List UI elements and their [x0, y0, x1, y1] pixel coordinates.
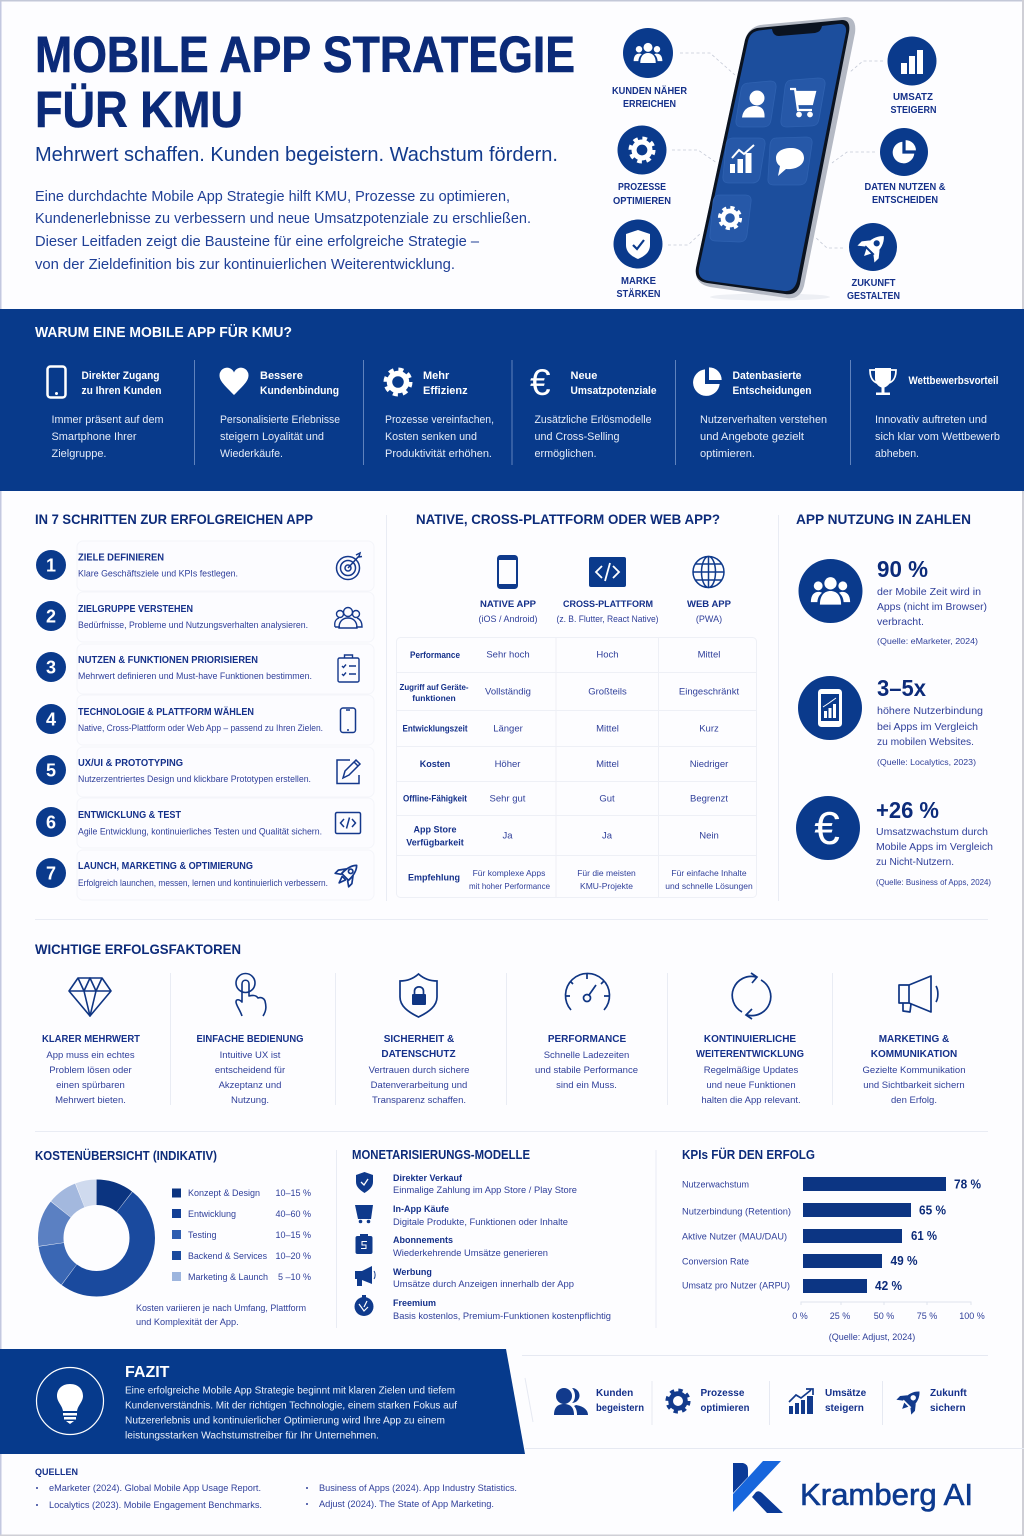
outcome: umsätze steigern: Umsätze [825, 1388, 867, 1399]
panel: native cross-plattform web comparison: NATIVE, CROSS-PLATTFORM ODER WEB APP? [416, 511, 720, 527]
outcome: zukunft sichern: Zukunft [930, 1388, 967, 1399]
stat: 3-5x: zu mobilen Websites. [877, 736, 974, 748]
panel: warum eine mobile app: WARUM EINE MOBILE APP FÜR KMU? [35, 324, 292, 341]
comparison table: Kosten [420, 759, 450, 769]
benefit: umsatzpotenziale: Zusätzliche Erlösmodelle [534, 414, 652, 426]
step 2 [36, 601, 362, 631]
stat: +26 %: (Quelle: Business of Apps, 2024) [876, 877, 991, 887]
intro paragraph: von der Zieldefinition bis zur kontinuierlichen Weiterentwicklung. [35, 257, 455, 273]
model: direkter verkauf: Direkter Verkauf [393, 1173, 463, 1183]
donut legend: Testing [188, 1230, 217, 1240]
model: in-app käufe [355, 1204, 568, 1227]
outcome: umsätze steigern: steigern [825, 1403, 864, 1414]
factor: einfache bedienung [196, 974, 304, 1106]
tile icon: person [742, 90, 765, 118]
tile icon: growth chart [730, 145, 754, 173]
benefit: direkter zugang: zu Ihren Kunden [82, 385, 162, 397]
step 6 [36, 807, 360, 837]
cost note: Kosten variieren je nach Umfang, Plattform [136, 1303, 306, 1313]
benefit: umsatzpotenziale: ermöglichen. [534, 448, 596, 460]
logo: kramberg ai: Kramberg AI [800, 1477, 973, 1512]
outcome: prozesse optimieren: Prozesse [700, 1388, 745, 1399]
panel: app nutzung in zahlen: APP NUTZUNG IN ZAHLEN [796, 511, 971, 527]
hero feature: Kunden näher erreichen: KUNDEN NÄHER [612, 84, 687, 97]
stat: 90 % [798, 556, 987, 646]
tile icon: chat bubble [776, 148, 804, 176]
comparison table: Höher [495, 759, 520, 770]
fazit panel [0, 1349, 525, 1454]
comparison table: App Store [413, 824, 457, 834]
donut legend: Marketing & Launch [188, 1272, 268, 1282]
comparison table: Sehr gut [490, 794, 526, 804]
comparison table: und schnelle Lösungen [665, 881, 753, 891]
quellen [35, 1467, 517, 1510]
step 2: ZIELGRUPPE VERSTEHEN [78, 603, 193, 615]
quellen: Adjust (2024). The State of App Marketing. [319, 1499, 494, 1509]
step 7: Erfolgreich launchen, messen, lernen und kontinuierlich verbessern. [78, 878, 328, 888]
fazit panel: Nutzererlebnis und kontinuierlicher Optimierung wird Ihre App zu einem [125, 1416, 445, 1426]
step 3: Mehrwert definieren und Must-have Funktionen bestimmen. [78, 671, 312, 681]
panel: app nutzung in zahlen [796, 511, 993, 887]
intro paragraph: Kundenerlebnisse zu verbessern und neue Umsatzpotenziale zu erschließen. [35, 211, 531, 227]
stat: 3-5x: 3–5x [877, 675, 926, 701]
comparison table: Kurz [699, 724, 719, 734]
factor: weiterentwicklung: KONTINUIERLICHE [704, 1034, 796, 1045]
donut legend: 40–60 % [275, 1209, 311, 1219]
benefit: datenbasiert [693, 367, 827, 460]
benefit: kundenbindung: Bessere [260, 370, 303, 382]
factor: sicherheit: Transparenz schaffen. [372, 1095, 466, 1106]
step 1: Klare Geschäftsziele und KPIs festlegen. [78, 568, 238, 578]
kpi labels: Nutzerbindung (Retention) [682, 1206, 791, 1216]
hero feature: Umsatz steigern: UMSATZ [893, 91, 934, 103]
hero feature: Umsatz steigern [888, 36, 936, 116]
stat: 3-5x: bei Apps im Vergleich [877, 721, 978, 733]
comparison table: Eingeschränkt [679, 686, 739, 698]
model: abonnements [356, 1234, 548, 1258]
column head: cross-plattform: CROSS-PLATTFORM [563, 599, 653, 610]
cost note [136, 1303, 306, 1327]
comparison table: Entwicklungszeit [402, 724, 468, 734]
factor: klarer mehrwert: Mehrwert bieten. [55, 1095, 126, 1106]
step 2: Bedürfnisse, Probleme und Nutzungsverhalten analysieren. [78, 620, 308, 630]
benefit: umsatzpotenziale: Neue [570, 370, 597, 382]
quellen: Localytics (2023). Mobile Engagement Benchmarks. [49, 1500, 262, 1510]
stat: 3-5x: (Quelle: Localytics, 2023) [877, 757, 976, 767]
panel: wichtige erfolgsfaktoren: WICHTIGE ERFOLGSFAKTOREN [35, 941, 241, 957]
title: MOBILE APP STRATEGIE [35, 26, 575, 83]
cost note: und Komplexität der App. [136, 1317, 239, 1327]
hero feature: Umsatz steigern: STEIGERN [890, 104, 936, 116]
kpi labels: Umsatz pro Nutzer (ARPU) [682, 1280, 790, 1290]
factor: marketing [863, 976, 965, 1106]
stat: 90 %: der Mobile Zeit wird in [877, 586, 981, 598]
intro paragraph: Eine durchdachte Mobile App Strategie hilft KMU, Prozesse zu optimieren, [35, 189, 510, 205]
phone body [696, 17, 855, 300]
model: abonnements: Abonnements [393, 1235, 453, 1245]
comparison table: funktionen [412, 693, 456, 703]
panel: kpis für den erfolg: KPIs FÜR DEN ERFOLG [682, 1147, 815, 1162]
panel: monetarisierungs-modelle: MONETARISIERUNGS-MODELLE [352, 1148, 530, 1162]
icon: light bulb [36, 1368, 104, 1434]
comparison table: Ja [602, 830, 613, 842]
model: freemium: Freemium [393, 1298, 436, 1308]
benefit: wettbewerbsvorteil: sich klar vom Wettbewerb [875, 431, 1000, 443]
donut legend: 10–15 % [275, 1188, 311, 1198]
comparison table: Verfügbarkeit [406, 838, 464, 848]
factor: marketing: KOMMUNIKATION [871, 1049, 957, 1060]
benefit: umsatzpotenziale [530, 362, 656, 460]
comparison table: Mittel [596, 759, 619, 770]
benefit: wettbewerbsvorteil: Wettbewerbsvorteil [908, 375, 998, 387]
factor: sicherheit [369, 974, 469, 1106]
column head: native app [478, 599, 538, 624]
benefit: kundenbindung: Wiederkäufe. [220, 448, 283, 460]
benefit: kundenbindung [219, 368, 340, 460]
outcome: kunden begeistern [554, 1388, 644, 1415]
model: in-app käufe: In-App Käufe [393, 1204, 449, 1214]
step 7 [36, 858, 363, 890]
app tiles [710, 78, 825, 242]
column dividers bottom row [336, 1150, 656, 1328]
hero feature: Daten nutzen [864, 128, 946, 206]
kpi values [875, 1178, 981, 1293]
panel: kpis für den erfolg [682, 1147, 985, 1342]
factor: einfache bedienung: Akzeptanz und [219, 1080, 281, 1091]
benefit: kundenbindung: steigern Loyalität und [220, 431, 324, 443]
outcome: zukunft sichern [895, 1384, 967, 1416]
hero: phone illustration [668, 17, 883, 300]
hero feature: Prozesse optimieren: PROZESSE [618, 181, 666, 193]
fazit panel: Kundenverständnis. Mit der richtigen Technologie, einem starken Fokus auf [125, 1400, 457, 1412]
step 3: 3 [46, 658, 56, 678]
factor: klarer mehrwert: KLARER MEHRWERT [42, 1034, 140, 1045]
donut legend: Backend & Services [188, 1251, 267, 1261]
factor: einfache bedienung: EINFACHE BEDIENUNG [196, 1034, 304, 1045]
hero feature: Daten nutzen: DATEN NUTZEN & [864, 181, 946, 193]
benefit: umsatzpotenziale: und Cross-Selling [534, 431, 620, 443]
benefit: datenbasiert: Datenbasierte [732, 370, 802, 382]
kpi values: 65 % [919, 1204, 946, 1218]
stat: 90 %: verbracht. [877, 616, 924, 628]
column head: web app [687, 599, 732, 624]
factor: einfache bedienung: Nutzung. [231, 1095, 269, 1106]
benefit: direkter zugang: Zielgruppe. [52, 448, 106, 460]
model: freemium: Basis kostenlos, Premium-Funktionen kostenpflichtig [393, 1311, 611, 1321]
benefit: wettbewerbsvorteil: abheben. [875, 448, 919, 460]
factor: weiterentwicklung: Regelmäßige Updates [704, 1065, 799, 1076]
model: in-app käufe: Digitale Produkte, Funktionen oder Inhalte [393, 1217, 568, 1227]
comparison table: Mittel [698, 650, 720, 660]
factor: weiterentwicklung: halten die App relevant. [701, 1095, 801, 1106]
comparison table: Performance [410, 650, 460, 660]
hero feature: Marke stärken: STÄRKEN [616, 287, 660, 300]
hero feature: Prozesse optimieren: OPTIMIEREN [613, 195, 671, 207]
stat: 3-5x: höhere Nutzerbindung [877, 705, 983, 717]
fazit panel: leistungsstarken Wachstumstreiber für Ihr Unternehmen. [125, 1430, 379, 1442]
column head: native app: (iOS / Android) [478, 614, 538, 624]
kpi axis: 50 % [874, 1311, 894, 1321]
hero feature: Kunden näher erreichen [612, 28, 687, 110]
quellen: eMarketer (2024). Global Mobile App Usage Report. [49, 1483, 261, 1493]
factor: marketing: und Sichtbarkeit sichern [863, 1080, 965, 1091]
benefit: effizienz: Mehr [423, 370, 450, 382]
benefit: direkter zugang [48, 366, 164, 460]
factor: performance: Schnelle Ladezeiten [544, 1050, 629, 1061]
benefit: datenbasiert: Entscheidungen [732, 385, 812, 397]
step 6: Agile Entwicklung, kontinuierliches Testen und Qualität sichern. [78, 826, 322, 836]
kpi axis [792, 1302, 985, 1342]
benefit: wettbewerbsvorteil: Innovativ auftreten und [875, 414, 987, 426]
benefit: effizienz: Prozesse vereinfachen, [385, 414, 494, 426]
factor: sicherheit: Vertrauen durch sichere [369, 1065, 469, 1076]
hero feature: Marke stärken [614, 220, 662, 300]
step 5: UX/UI & PROTOTYPING [78, 757, 183, 769]
comparison table: Niedriger [690, 759, 728, 770]
hero feature: Zukunft gestalten [847, 223, 900, 302]
benefit: umsatzpotenziale: € [530, 362, 551, 403]
kpi axis: 75 % [917, 1311, 937, 1321]
factor: sicherheit: Datenverarbeitung und [371, 1080, 467, 1091]
kpi labels: Conversion Rate [682, 1256, 749, 1266]
column head: cross-plattform: (z. B. Flutter, React Native) [556, 614, 659, 624]
tile icon: gear [720, 208, 740, 228]
comparison table: Sehr hoch [486, 650, 530, 660]
comparison table [396, 637, 757, 898]
kpi axis: 25 % [830, 1311, 850, 1321]
step 7: LAUNCH, MARKETING & OPTIMIERUNG [78, 860, 253, 872]
kpi axis: 0 % [792, 1311, 808, 1321]
intro paragraph [35, 189, 531, 273]
hero feature: Daten nutzen: ENTSCHEIDEN [872, 194, 938, 206]
icon: code [589, 557, 626, 587]
comparison table: Begrenzt [690, 794, 728, 804]
step 4: 4 [46, 710, 56, 730]
stat: +26 %: +26 % [876, 797, 939, 823]
kpi axis: 100 % [959, 1311, 985, 1321]
kpi values: 61 % [911, 1229, 937, 1243]
step 4: TECHNOLOGIE & PLATTFORM WÄHLEN [78, 705, 254, 718]
comparison table: mit hoher Performance [469, 881, 550, 891]
step 4: Native, Cross-Plattform oder Web App – passend zu Ihren Zielen. [78, 723, 323, 733]
model: werbung: Werbung [393, 1267, 432, 1277]
benefit: datenbasiert: Nutzerverhalten verstehen [700, 414, 827, 426]
hero feature: Kunden näher erreichen: ERREICHEN [623, 98, 676, 110]
comparison table: Gut [599, 794, 615, 804]
benefit: kundenbindung: Kundenbindung [260, 385, 339, 397]
step 5 [36, 755, 360, 785]
comparison table: Mittel [596, 724, 619, 734]
column head: native app: NATIVE APP [480, 599, 537, 610]
stat: +26 %: Mobile Apps im Vergleich [876, 841, 993, 853]
step 6: ENTWICKLUNG & TEST [78, 809, 181, 821]
comparison table: Für die meisten [577, 868, 636, 878]
model: werbung: Umsätze durch Anzeigen innerhalb der App [393, 1279, 574, 1289]
comparison table: Offline-Fähigkeit [403, 794, 467, 804]
outcome: kunden begeistern: begeistern [596, 1403, 644, 1414]
benefit: direkter zugang: Immer präsent auf dem [52, 414, 164, 426]
outcome: kunden begeistern: Kunden [596, 1388, 633, 1399]
benefit: effizienz [385, 370, 494, 460]
comparison table: Großteils [588, 686, 627, 698]
kpi bars [803, 1177, 946, 1293]
benefit: datenbasiert: optimieren. [700, 448, 755, 460]
step 2: 2 [46, 606, 56, 626]
panel: 7 schritte: IN 7 SCHRITTEN ZUR ERFOLGREICHEN APP [35, 511, 313, 527]
outcome: zukunft sichern: sichern [930, 1403, 966, 1414]
outcome: prozesse optimieren: optimieren [700, 1403, 750, 1414]
kpi labels: Nutzerwachstum [682, 1180, 749, 1190]
benefit: effizienz: Kosten senken und [385, 431, 477, 443]
benefit: direkter zugang: Direkter Zugang [82, 370, 160, 382]
factor: performance: und stabile Performance [535, 1065, 638, 1076]
stat: 90 %: Apps (nicht im Browser) [877, 601, 987, 613]
step 7: 7 [46, 864, 56, 884]
outcome: prozesse optimieren [667, 1388, 750, 1414]
panel: wichtige erfolgsfaktoren [35, 941, 965, 1106]
step 5: 5 [46, 760, 56, 780]
panel: kostenübersicht: KOSTENÜBERSICHT (INDIKATIV) [35, 1148, 217, 1163]
factor: sicherheit: SICHERHEIT & [384, 1034, 454, 1045]
stat: +26 % [796, 796, 993, 887]
donut legend: 10–20 % [275, 1251, 311, 1261]
benefit: effizienz: Produktivität erhöhen. [385, 448, 492, 460]
column head: web app: (PWA) [696, 614, 722, 624]
panel: kostenübersicht [35, 1148, 311, 1327]
comparison table: Zugriff auf Geräte- [400, 682, 469, 692]
step 4 [36, 704, 356, 734]
fazit panel: FAZIT [125, 1364, 170, 1381]
logo: kramberg ai [733, 1461, 973, 1513]
section dividers [35, 515, 988, 1132]
comparison table: Vollständig [485, 686, 531, 698]
quellen: QUELLEN [35, 1467, 78, 1477]
step 5: Nutzerzentriertes Design und klickbare Prototypen erstellen. [78, 774, 311, 784]
benefit: effizienz: Effizienz [423, 385, 468, 397]
model: direkter verkauf: Einmalige Zahlung im App Store / Play Store [393, 1185, 577, 1195]
factor: marketing: Gezielte Kommunikation [863, 1065, 965, 1076]
icon: globe [693, 556, 724, 588]
outcome: umsätze steigern [789, 1388, 867, 1414]
kpi values: 78 % [954, 1178, 981, 1192]
factor: klarer mehrwert [42, 978, 140, 1106]
benefit: umsatzpotenziale: Umsatzpotenziale [570, 385, 656, 397]
column head: cross-plattform [556, 599, 659, 624]
panel: native cross-plattform web comparison [396, 511, 757, 898]
kpi axis: (Quelle: Adjust, 2024) [829, 1332, 915, 1342]
panel: warum eine mobile app [0, 309, 1024, 491]
hero feature: Zukunft gestalten: GESTALTEN [847, 290, 900, 302]
kpi labels [682, 1180, 791, 1290]
title: FÜR KMU [35, 81, 243, 138]
factor: klarer mehrwert: einen spürbaren [56, 1080, 125, 1091]
model: abonnements: Wiederkehrende Umsätze generieren [393, 1248, 548, 1258]
step 6: 6 [46, 812, 56, 832]
factor: performance: PERFORMANCE [548, 1034, 626, 1045]
model: freemium [354, 1295, 611, 1321]
factor: sicherheit: DATENSCHUTZ [381, 1049, 456, 1060]
panel: monetarisierungs-modelle [352, 1148, 611, 1321]
factor: performance: sind ein Muss. [556, 1080, 617, 1091]
comparison table: Für komplexe Apps [473, 868, 545, 878]
column head: web app: WEB APP [687, 599, 732, 610]
factor: weiterentwicklung: WEITERENTWICKLUNG [696, 1049, 804, 1060]
panel: 7 schritte [35, 511, 374, 900]
donut legend: 10–15 % [275, 1230, 311, 1240]
tile icon: cart [790, 89, 815, 116]
stat: 3-5x [798, 675, 983, 767]
hero feature: Prozesse optimieren [613, 126, 671, 207]
step 1: ZIELE DEFINIEREN [78, 552, 164, 564]
step 1: 1 [46, 556, 56, 576]
hero feature: Marke stärken: MARKE [621, 275, 656, 287]
comparison table: Empfehlung [408, 872, 460, 882]
factor: weiterentwicklung [696, 973, 804, 1106]
donut legend: Konzept & Design [188, 1188, 260, 1198]
donut legend [172, 1188, 311, 1282]
factor: marketing: MARKETING & [879, 1034, 949, 1045]
comparison table: Nein [699, 830, 719, 842]
quellen: Business of Apps (2024). App Industry Statistics. [319, 1483, 517, 1493]
comparison table: Länger [493, 724, 523, 734]
stat: +26 %: zu Nicht-Nutzern. [876, 856, 954, 868]
comparison table: KMU-Projekte [580, 881, 633, 891]
stat: 90 %: (Quelle: eMarketer, 2024) [877, 636, 978, 646]
factor: performance [535, 973, 638, 1091]
connectors [668, 53, 883, 248]
title [35, 26, 575, 138]
factor: weiterentwicklung: und neue Funktionen [706, 1080, 796, 1091]
kpi values: 49 % [890, 1254, 918, 1268]
donut legend: Entwicklung [188, 1209, 236, 1219]
kpi values: 42 % [875, 1279, 902, 1293]
model: werbung [355, 1266, 574, 1289]
hero feature: Zukunft gestalten: ZUKUNFT [852, 277, 896, 289]
stat: +26 %: Umsatzwachstum durch [876, 826, 988, 838]
factor: einfache bedienung: Intuitive UX ist [220, 1050, 281, 1061]
benefit: datenbasiert: und Angebote gezielt [700, 431, 804, 443]
step 1 [36, 550, 362, 580]
factor: klarer mehrwert: App muss ein echtes [46, 1050, 135, 1061]
comparison table: Hoch [596, 650, 619, 660]
stat: +26 %: € [814, 802, 840, 854]
outcome strip [522, 1355, 1024, 1449]
step 3 [36, 652, 359, 682]
comparison table: Für einfache Inhalte [671, 868, 747, 878]
step 3: NUTZEN & FUNKTIONEN PRIORISIEREN [78, 654, 258, 666]
model: direkter verkauf [356, 1172, 577, 1195]
factor: klarer mehrwert: Problem lösen oder [49, 1065, 132, 1076]
benefit: wettbewerbsvorteil [870, 368, 1000, 460]
stat: 90 %: 90 % [877, 556, 928, 582]
intro paragraph: Dieser Leitfaden zeigt die Bausteine für eine erfolgreiche Strategie – [35, 234, 480, 250]
kpi labels: Aktive Nutzer (MAU/DAU) [682, 1232, 787, 1242]
fazit panel: Eine erfolgreiche Mobile App Strategie beginnt mit klaren Zielen und tiefem [125, 1386, 455, 1396]
benefit: kundenbindung: Personalisierte Erlebnisse [220, 414, 340, 426]
comparison table: Ja [502, 830, 513, 842]
donut legend: 5 –10 % [278, 1272, 311, 1282]
subtitle: Mehrwert schaffen. Kunden begeistern. Wachstum fördern. [35, 144, 558, 166]
benefit: direkter zugang: Smartphone Ihrer [52, 431, 137, 443]
icon: native phone [498, 556, 517, 588]
donut chart [51, 1192, 142, 1284]
factor: einfache bedienung: entscheidend für [215, 1065, 285, 1076]
factor: marketing: den Erfolg. [891, 1095, 937, 1106]
